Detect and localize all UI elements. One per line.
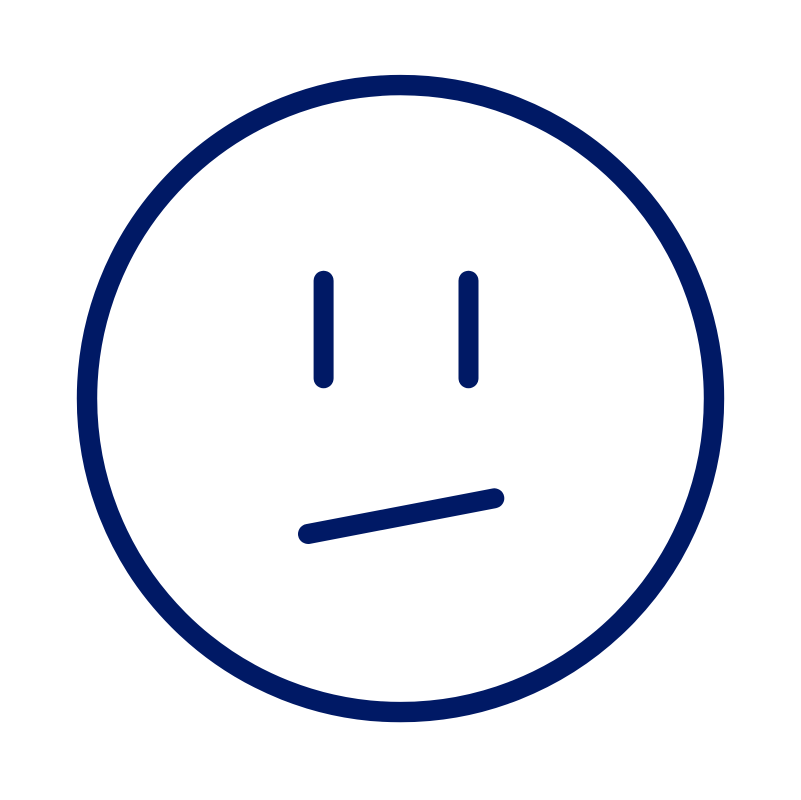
face outline <box>87 85 714 712</box>
mouth <box>308 498 494 534</box>
left eye <box>314 281 334 378</box>
right eye <box>458 281 478 378</box>
